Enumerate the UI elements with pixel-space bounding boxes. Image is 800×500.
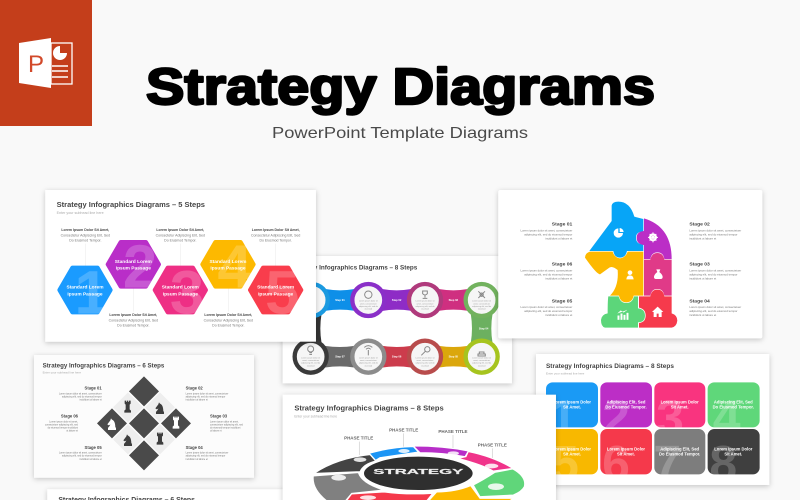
tile 8: Sit Amet. <box>724 452 742 457</box>
node icons <box>308 291 485 356</box>
hexagon 3: Ipsum Passage <box>163 291 198 297</box>
panel: strategy wheel 8 steps <box>283 395 556 500</box>
step labels: Step 07 <box>335 355 345 359</box>
tile 4: Do Eiusmod Tempor. <box>713 405 754 410</box>
stage labels: Stage 01 <box>552 222 573 228</box>
stage labels: incididunt ut labore et <box>545 313 573 317</box>
tile 5: Sit Amet. <box>563 452 581 457</box>
phase titles: PHASE TITLE <box>438 429 468 434</box>
stage labels: adipiscing elit, sed do eiusmod tempor <box>524 232 572 236</box>
node captions: adipiscing elit, sed do <box>359 305 379 308</box>
hexagon captions: Lorem Ipsum Dolor Sit Amet, <box>204 313 252 317</box>
stage labels: adipiscing elit, sed do eiusmod tempor <box>689 309 737 313</box>
stage labels: adipiscing elit, sed do eiusmod tempor <box>689 272 737 276</box>
hexagon 5: 5 <box>265 258 299 327</box>
node captions: Lorem ipsum dolor sit <box>301 356 321 359</box>
puzzle piece: blue <box>589 202 643 258</box>
tile 8: 8 <box>709 436 737 492</box>
hexagon 3: 3 <box>170 258 204 327</box>
stage labels: Stage 05 <box>85 445 102 450</box>
panel: hexagons 5 steps <box>45 190 316 342</box>
stage labels: Lorem ipsum dolor sit amet, consectetuer <box>689 228 741 232</box>
hexagon 1: Ipsum Passage <box>67 291 103 297</box>
panel: chess 6 steps <box>34 355 254 478</box>
segment dots <box>331 449 504 500</box>
node captions: Lorem ipsum dolor sit <box>472 300 492 303</box>
chess board diamonds <box>97 376 191 470</box>
icon: pie chart <box>614 228 624 238</box>
panel: bottom cropped slide <box>47 489 287 500</box>
subheading: Enter your subhead line here <box>294 414 337 418</box>
hexagon captions: Do Eiusmod Tempor. <box>69 239 102 243</box>
node captions: Lorem ipsum dolor sit <box>359 300 378 303</box>
node captions: amet, consectetuer <box>473 302 490 305</box>
hexagon 1: Standard Lorem <box>66 285 104 291</box>
icon: gear <box>648 232 658 242</box>
stage labels: do eiusmod tempor incididunt <box>48 426 78 429</box>
panel: knight puzzle <box>498 190 762 338</box>
hexagon captions: Lorem Ipsum Dolor Sit Amet, <box>61 228 109 232</box>
tile 3: 3 <box>656 390 684 446</box>
hexagon captions: Consectetur Adipiscing Elit, Sed <box>204 318 253 322</box>
icon: PowerPoint logo: P <box>28 51 44 78</box>
stage labels: Stage 03 <box>210 414 228 419</box>
icon: person <box>626 270 634 279</box>
node captions: eiusmod <box>421 309 429 311</box>
tile 6: Sit Amet. <box>617 452 635 457</box>
tile 1: 1 <box>549 390 577 446</box>
stage labels: adipiscing elit, sed do eiusmod tempor <box>524 272 572 276</box>
panel: chain 8 steps <box>283 256 512 383</box>
tile 1: Sit Amet. <box>563 405 581 410</box>
puzzle piece: green <box>601 296 645 328</box>
stage labels: incididunt ut labore et <box>545 236 573 240</box>
node captions: amet, consectetuer <box>473 359 490 362</box>
connector lines <box>85 244 276 312</box>
tile 2: 2 <box>602 390 630 446</box>
tile 6: 6 <box>602 436 630 492</box>
hexagon 3: Standard Lorem <box>162 285 199 291</box>
central ellipse <box>363 456 473 491</box>
stage labels: Lorem ipsum dolor sit amet, consectetuer <box>520 228 572 232</box>
tile 1 <box>546 382 598 428</box>
step labels: Step 05 <box>449 355 459 359</box>
step labels: Step 01 <box>335 298 345 302</box>
stage labels: incididunt ut labore et <box>689 313 716 317</box>
subheading: Enter your subhead line here <box>57 211 104 215</box>
tile 3 <box>654 382 706 428</box>
hexagon captions: Consectetur Adipiscing Elit, Sed <box>156 233 205 237</box>
stage labels: adipiscing elit, sed do eiusmod tempor <box>524 309 572 313</box>
icon: bar chart <box>618 310 628 320</box>
node captions: eiusmod <box>478 365 485 367</box>
tile 7: 7 <box>653 436 681 492</box>
stage labels: Lorem ipsum dolor sit amet, consectetuer <box>520 305 572 309</box>
node captions: eiusmod <box>365 365 372 367</box>
node captions: Lorem ipsum dolor sit <box>415 300 435 303</box>
node captions: adipiscing elit, sed do <box>415 305 435 308</box>
hexagon captions: Consectetur Adipiscing Elit, Sed <box>61 233 110 237</box>
node captions: adipiscing elit, sed do <box>359 362 379 365</box>
hexagon 4: Ipsum Passage <box>210 266 246 272</box>
stage labels: Stage 03 <box>689 262 710 268</box>
subheading: Enter your subhead line here <box>43 370 81 374</box>
stage labels: incididunt ut labore et <box>689 236 716 240</box>
hexagon 5 <box>250 258 301 327</box>
node captions: eiusmod <box>421 365 429 367</box>
node captions: amet, consectetuer <box>417 302 434 305</box>
hexagon 1 <box>59 258 111 327</box>
phase titles: PHASE TITLE <box>344 436 373 441</box>
step labels: Step 03 <box>449 298 459 302</box>
tile 7 <box>654 429 706 474</box>
connectors <box>297 286 496 371</box>
stage labels: Stage 04 <box>186 445 203 450</box>
node captions: Lorem ipsum dolor sit <box>415 356 435 359</box>
node captions: eiusmod <box>478 309 485 311</box>
tile 2 <box>600 382 652 428</box>
tile 5: Lorem Ipsum Dolor <box>553 446 591 451</box>
stage labels: adipiscing elit, sed do eiusmod tempor <box>186 395 225 398</box>
stage labels: consectetuer adipiscing elit, sed <box>45 423 79 426</box>
stage labels: Lorem ipsum dolor sit amet, consectetuer <box>689 268 741 272</box>
hexagon captions: Lorem Ipsum Dolor Sit Amet, <box>109 313 157 317</box>
stage labels: Stage 06 <box>61 414 79 419</box>
stage labels: do eiusmod tempor incididunt <box>210 426 241 429</box>
subtitle: PowerPoint Template Diagrams <box>272 125 528 142</box>
hexagon 5: Standard Lorem <box>257 285 294 291</box>
tile 7: Adipiscing Elit, Sed <box>660 446 700 451</box>
stage labels: ut labore et <box>210 430 222 433</box>
puzzle piece: pink <box>644 253 672 296</box>
hexagon captions: Do Eiusmod Tempor. <box>164 239 197 243</box>
stage labels: Stage 02 <box>689 222 710 228</box>
hexagon 5: Ipsum Passage <box>258 291 294 297</box>
central ellipse: STRATEGY <box>373 469 464 476</box>
hexagon 3 <box>155 258 206 327</box>
stage labels: incididunt ut labore et <box>689 276 716 280</box>
hexagon 2: 2 <box>123 233 157 302</box>
stage labels: Lorem ipsum dolor sit amet, <box>210 420 239 423</box>
stage labels: Stage 04 <box>689 298 710 304</box>
step labels: Step 02 <box>392 298 402 302</box>
tile 2: Adipiscing Elit, Sed <box>607 399 646 404</box>
tile 5: 5 <box>551 436 579 492</box>
hexagon captions: Lorem Ipsum Dolor Sit Amet, <box>156 228 204 232</box>
node captions <box>301 300 492 367</box>
icon: money bag <box>654 269 663 279</box>
tile 2: Do Eiusmod Tempor. <box>605 405 647 410</box>
hexagon 2: Standard Lorem <box>115 259 152 265</box>
hexagon captions: Do Eiusmod Tempor. <box>260 239 292 243</box>
stage labels: incididunt ut labore et <box>186 458 208 461</box>
node captions: Lorem ipsum dolor sit <box>359 356 378 359</box>
stage labels: consectetuer adipiscing elit, sed <box>210 423 244 426</box>
node captions: eiusmod <box>307 365 314 367</box>
tile 3: Sit Amet. <box>671 405 689 410</box>
tile 3: Lorem Ipsum Dolor <box>661 399 699 404</box>
phase titles: PHASE TITLE <box>389 427 418 432</box>
stage labels: Stage 05 <box>552 298 573 304</box>
stage labels: adipiscing elit, sed do eiusmod tempor <box>689 232 737 236</box>
node captions: adipiscing elit, sed do <box>472 305 492 308</box>
tile 1: Lorem Ipsum Dolor <box>553 399 591 404</box>
step labels: Step 06 <box>392 355 402 359</box>
wheel segments <box>313 446 525 500</box>
phase titles <box>344 427 507 447</box>
stage labels: ut labore et <box>66 430 78 433</box>
tile 7: Do Eiusmod Tempor. <box>659 452 700 457</box>
hexagon captions <box>61 228 300 328</box>
hexagon 4: 4 <box>217 233 252 302</box>
step labels <box>335 298 489 359</box>
stage labels: adipiscing elit, sed do eiusmod tempor <box>186 455 225 458</box>
node captions: adipiscing elit, sed do <box>415 362 435 365</box>
circle nodes <box>295 284 498 373</box>
leader lines <box>359 433 492 464</box>
icon: house <box>652 307 663 317</box>
hexagon captions: Consectetur Adipiscing Elit, Sed <box>109 318 158 322</box>
panel: rounded tiles 8 steps <box>536 354 769 492</box>
stage labels: incididunt ut labore et <box>80 399 102 402</box>
stage labels: incididunt ut labore et <box>80 458 102 461</box>
node captions: adipiscing elit, sed do <box>472 362 492 365</box>
tile 4: 4 <box>713 390 741 446</box>
stage labels: Lorem ipsum dolor sit amet, consectetuer <box>689 305 741 309</box>
hexagon 2: Ipsum Passage <box>116 266 151 272</box>
node captions: amet, consectetuer <box>360 359 377 362</box>
heading: Strategy Infographics Diagrams – 6 Steps <box>43 362 165 369</box>
puzzle piece: red <box>639 290 677 328</box>
tile 4: Adipiscing Elit, Sed <box>714 399 753 404</box>
hexagon captions: Do Eiusmod Tempor. <box>117 324 150 328</box>
node captions: amet, consectetuer <box>302 359 319 362</box>
stage labels: Lorem ipsum dolor sit amet, consectetuer <box>186 452 229 455</box>
title: Strategy Diagrams <box>146 58 655 115</box>
node captions: Lorem ipsum dolor sit <box>472 356 492 359</box>
tile 6 <box>600 429 652 474</box>
puzzle piece: purple <box>637 218 672 259</box>
heading: Strategy Infographics Diagrams – 5 Steps <box>57 200 205 209</box>
hexagon 1: 1 <box>75 258 109 327</box>
icon: PowerPoint logo <box>0 0 92 126</box>
heading: Strategy Infographics Diagrams – 8 Steps <box>292 264 418 271</box>
stage labels: Lorem ipsum dolor sit amet, consectetuer <box>59 392 102 395</box>
stage labels: Lorem ipsum dolor sit amet, consectetuer <box>520 268 572 272</box>
step labels: Step 04 <box>479 326 489 330</box>
hexagon 4: Standard Lorem <box>209 259 246 265</box>
stage labels: Stage 02 <box>186 386 203 391</box>
node captions: amet, consectetuer <box>360 302 377 305</box>
hexagon 4 <box>202 233 254 302</box>
stage labels <box>520 222 741 317</box>
phase titles: PHASE TITLE <box>478 442 507 447</box>
hexagon captions: Do Eiusmod Tempor. <box>212 324 245 328</box>
stage labels: Lorem ipsum dolor sit amet, <box>49 420 78 423</box>
tile 8 <box>708 429 760 474</box>
chess pieces <box>107 401 179 446</box>
stage labels <box>45 386 244 461</box>
stage labels: incididunt ut labore et <box>545 276 573 280</box>
stage labels: Stage 06 <box>552 262 573 268</box>
hexagon 2 <box>108 233 159 302</box>
stage labels: adipiscing elit, sed do eiusmod tempor <box>62 455 102 458</box>
hexagon captions: Consectetur Adipiscing Elit, Sed <box>251 233 300 237</box>
node captions: adipiscing elit, sed do <box>301 362 321 365</box>
heading: Strategy Infographics Diagrams – 8 Steps <box>546 363 674 370</box>
node captions: eiusmod <box>365 309 372 311</box>
hexagon captions: Lorem Ipsum Dolor Sit Amet, <box>252 228 300 232</box>
node captions: amet, consectetuer <box>417 359 434 362</box>
stage labels: incididunt ut labore et <box>186 399 208 402</box>
tile 8: Lorem Ipsum Dolor <box>714 446 753 451</box>
stage labels: adipiscing elit, sed do eiusmod tempor <box>62 395 102 398</box>
heading: Strategy Infographics Diagrams – 8 Steps <box>294 404 444 413</box>
stage labels: Stage 01 <box>85 386 102 391</box>
stage labels: Lorem ipsum dolor sit amet, consectetuer <box>59 452 102 455</box>
puzzle piece: yellow <box>585 252 643 302</box>
tile 4 <box>708 382 760 428</box>
tile 6: Lorem Ipsum Dolor <box>607 446 645 451</box>
tile 5 <box>556 429 598 474</box>
subheading: Enter your subhead line here <box>546 371 585 375</box>
stage labels: Lorem ipsum dolor sit amet, consectetuer <box>186 392 229 395</box>
